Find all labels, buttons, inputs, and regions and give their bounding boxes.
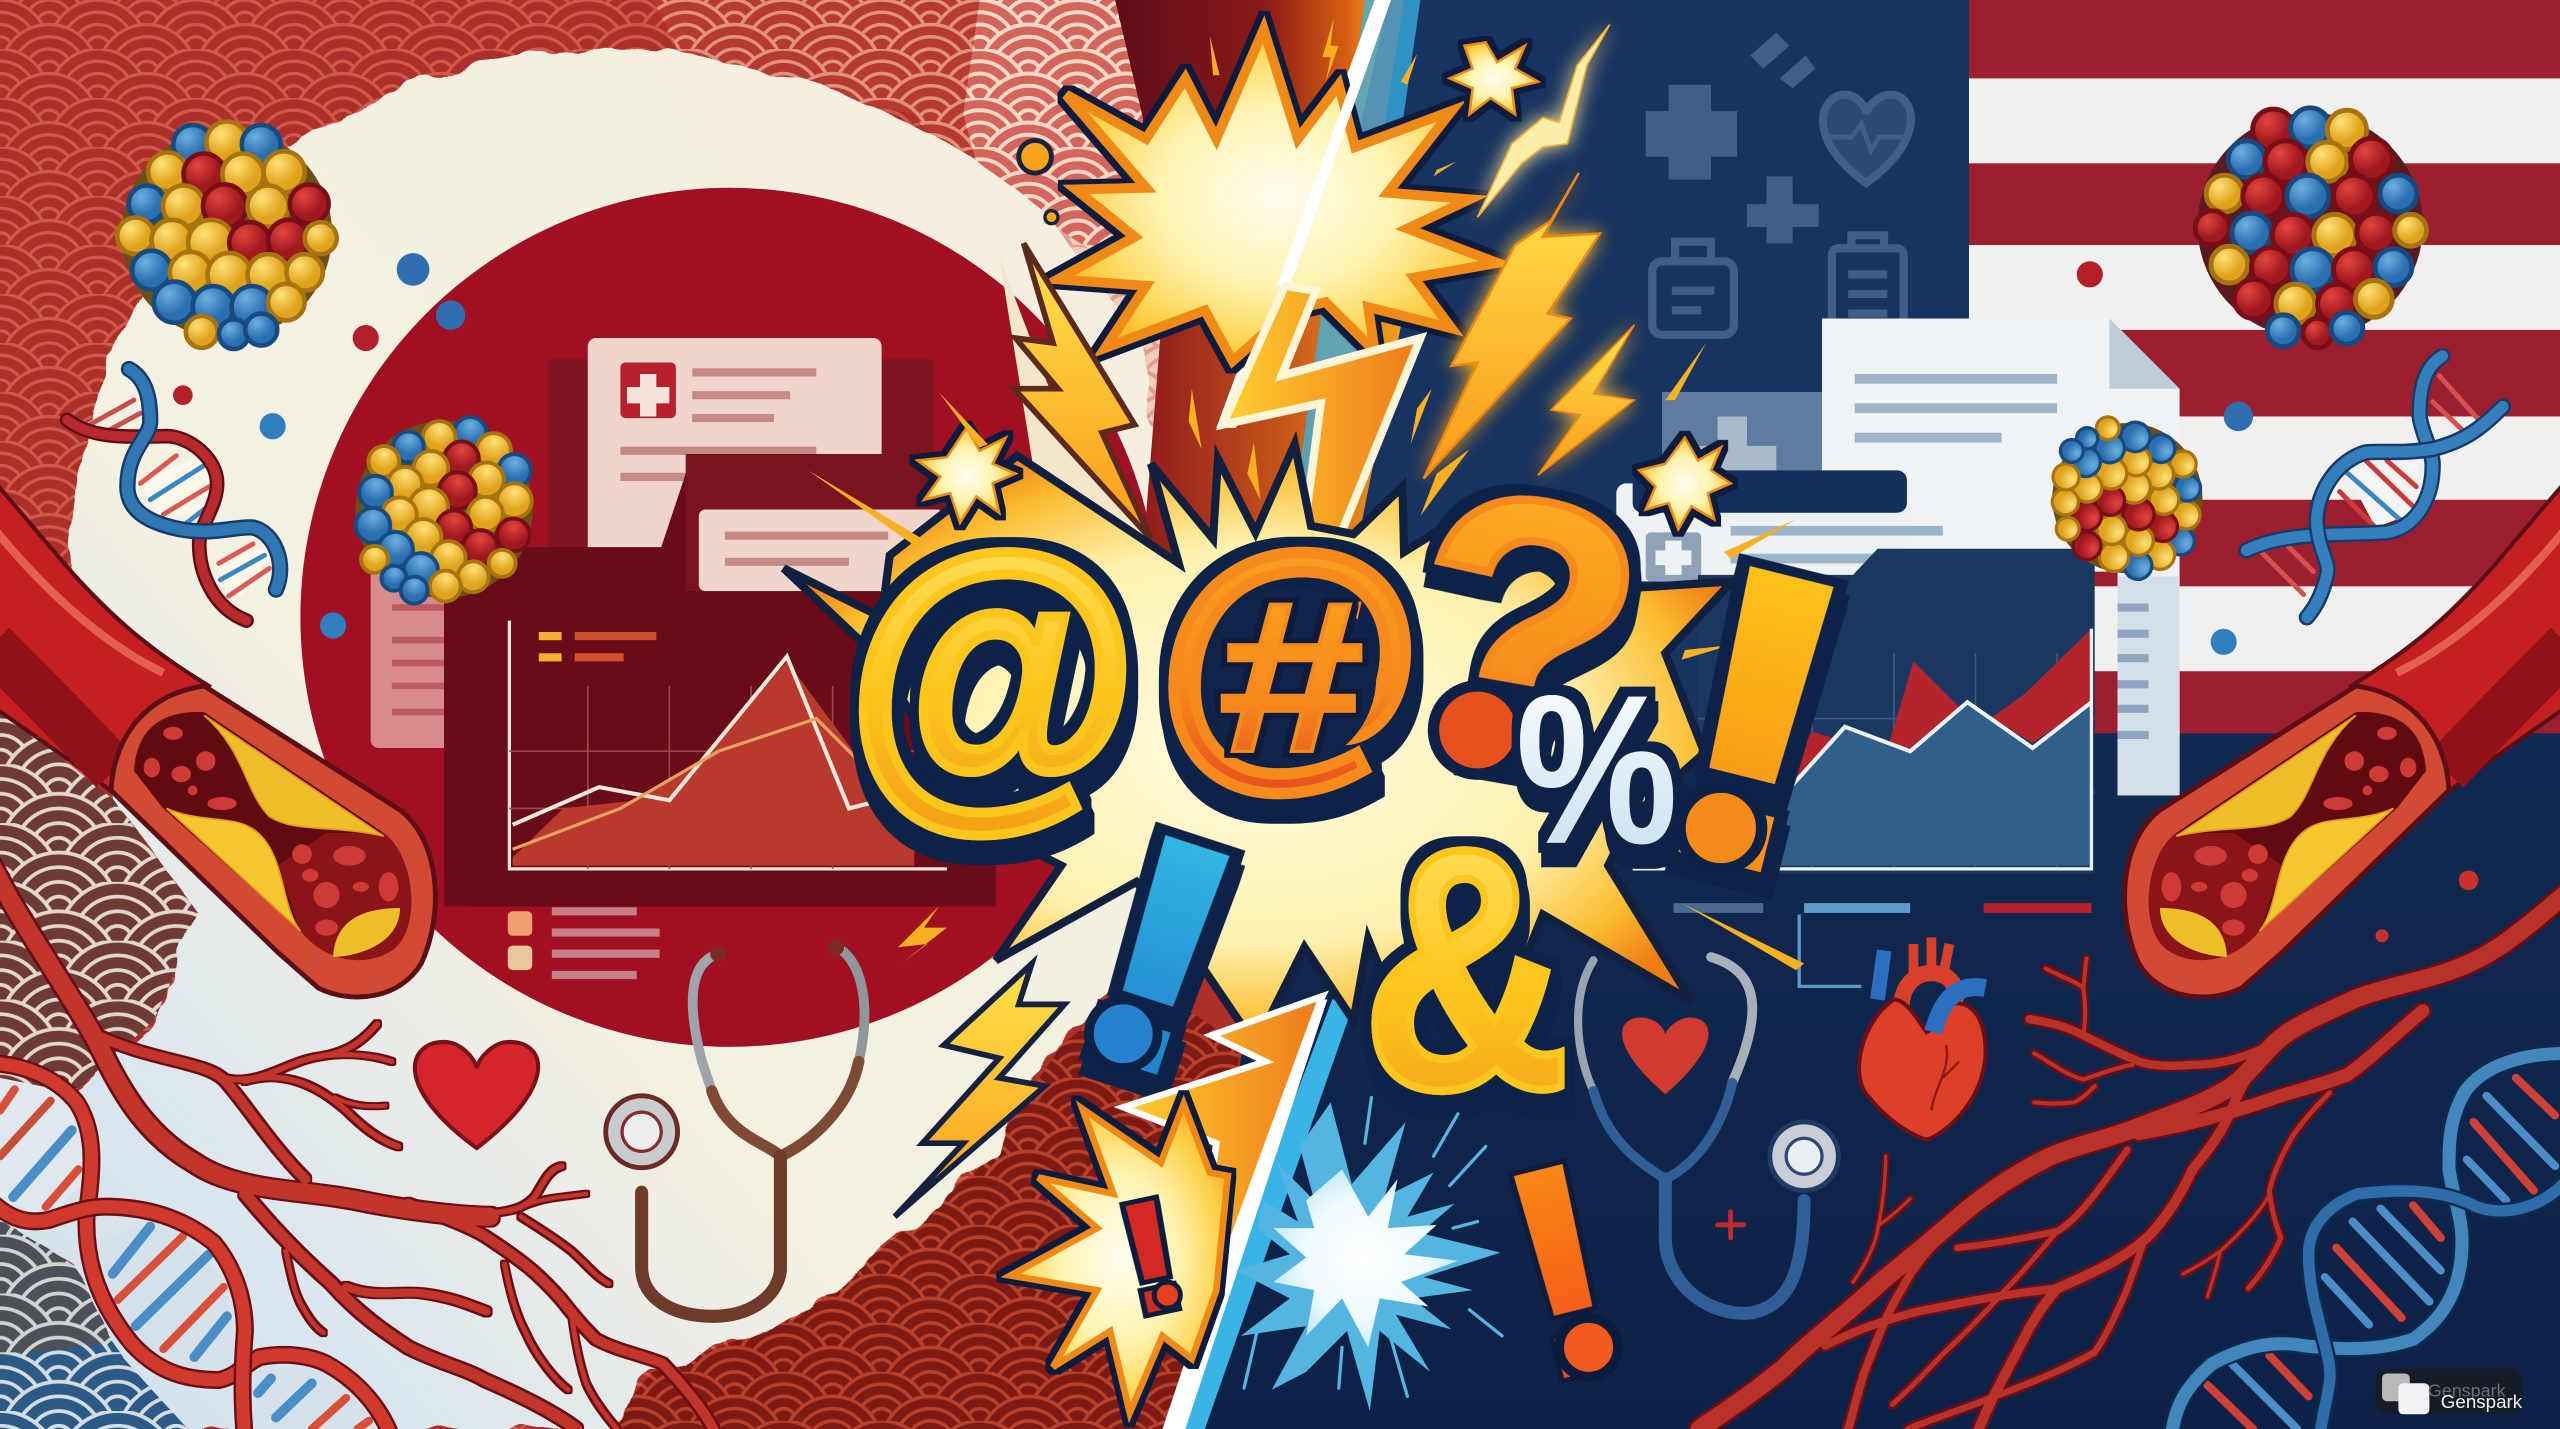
- bottom centre bolt: [1123, 996, 1322, 1429]
- DNA helix top left: [67, 369, 280, 621]
- small star left of symbols: [918, 428, 1016, 523]
- beam over starburst: [1277, 0, 1391, 286]
- top starburst: [1058, 29, 1497, 361]
- legend lines: [1673, 903, 2091, 986]
- symbol: percent: %: [1516, 651, 1678, 888]
- small star right of symbols: [1639, 438, 1731, 529]
- left veins: [0, 866, 713, 1429]
- stethoscope left: [606, 939, 864, 1316]
- heart icon right: [1622, 1017, 1708, 1094]
- symbol: at sign with hash: #: [1218, 556, 1365, 797]
- left blood vessel: [0, 479, 435, 997]
- watermark Genspark: [2376, 1369, 2523, 1414]
- symbol: at sign: @: [846, 489, 1139, 854]
- DNA helix bottom left: [0, 1063, 392, 1429]
- icons: faint medical symbols on blue panel: [1646, 33, 1911, 335]
- left documents stack: [371, 338, 934, 748]
- top centre bolt: [1223, 286, 1420, 539]
- floating molecules left and right: [173, 253, 2478, 942]
- watermark Genspark: Genspark: [2428, 1380, 2506, 1400]
- DNA helix top right: [2247, 356, 2503, 617]
- small star top right: [1450, 42, 1538, 114]
- symbol: orange exclamation: !: [1602, 463, 1911, 975]
- side document strip: [371, 563, 469, 748]
- thin lightning top right: [1478, 24, 1610, 217]
- right documents stack: [1616, 318, 2180, 795]
- line chart right: [1633, 629, 2095, 869]
- stethoscope right: [1578, 957, 1838, 1313]
- DNA helix bottom right: [2171, 1053, 2560, 1429]
- nanoparticle top left: [117, 122, 337, 349]
- panel: red sun circle: [300, 188, 1159, 1047]
- symbol: ampersand: &: [1362, 778, 1570, 1161]
- list snippet: [508, 911, 660, 975]
- right upper bolt: [1424, 173, 1600, 479]
- starburst with red exclamation: !: [1100, 1163, 1202, 1349]
- bottom left bolt: [895, 964, 1064, 1217]
- panel: white brush circle: [0, 48, 1208, 1429]
- legend swatches: [539, 632, 656, 661]
- left chart folder: [444, 454, 996, 975]
- anatomical heart: [1859, 937, 1986, 1140]
- central orange glow field: [1143, 310, 1404, 555]
- panel: american flag stripes: [1969, 0, 2560, 733]
- panel: right blue medical panel: [1306, 0, 1969, 735]
- spark dashes: [808, 18, 1804, 970]
- nanoparticle mid right: [2018, 387, 2235, 607]
- central explosion: [784, 444, 1732, 1045]
- heart icon left: [415, 1042, 538, 1148]
- right lower bolt: [1538, 325, 1634, 475]
- starburst with red exclamation: [1011, 1104, 1228, 1413]
- right blood vessel: [2125, 479, 2560, 997]
- orbs near top left of star: [1019, 140, 1058, 224]
- panel: cream wedge beside burst: [999, 256, 1151, 539]
- symbol: blue exclamation: !: [1030, 753, 1294, 1157]
- symbol: at sign with hash: @: [1159, 498, 1421, 808]
- right veins: [1700, 892, 2560, 1429]
- nanoparticle mid left: [311, 378, 576, 644]
- watermark Genspark: Genspark: [2441, 1391, 2523, 1412]
- symbol: question mark: ?: [1378, 407, 1670, 851]
- line chart left: [509, 621, 947, 869]
- blue starburst: [1236, 1097, 1502, 1411]
- document with plus: [588, 338, 882, 567]
- background: red wave pattern left half: [0, 0, 1404, 1429]
- nanoparticle top right: [2195, 108, 2427, 348]
- left bolt: [1014, 243, 1151, 539]
- central lightning divide: [1162, 0, 1420, 1429]
- right chart folder: [1633, 549, 2095, 986]
